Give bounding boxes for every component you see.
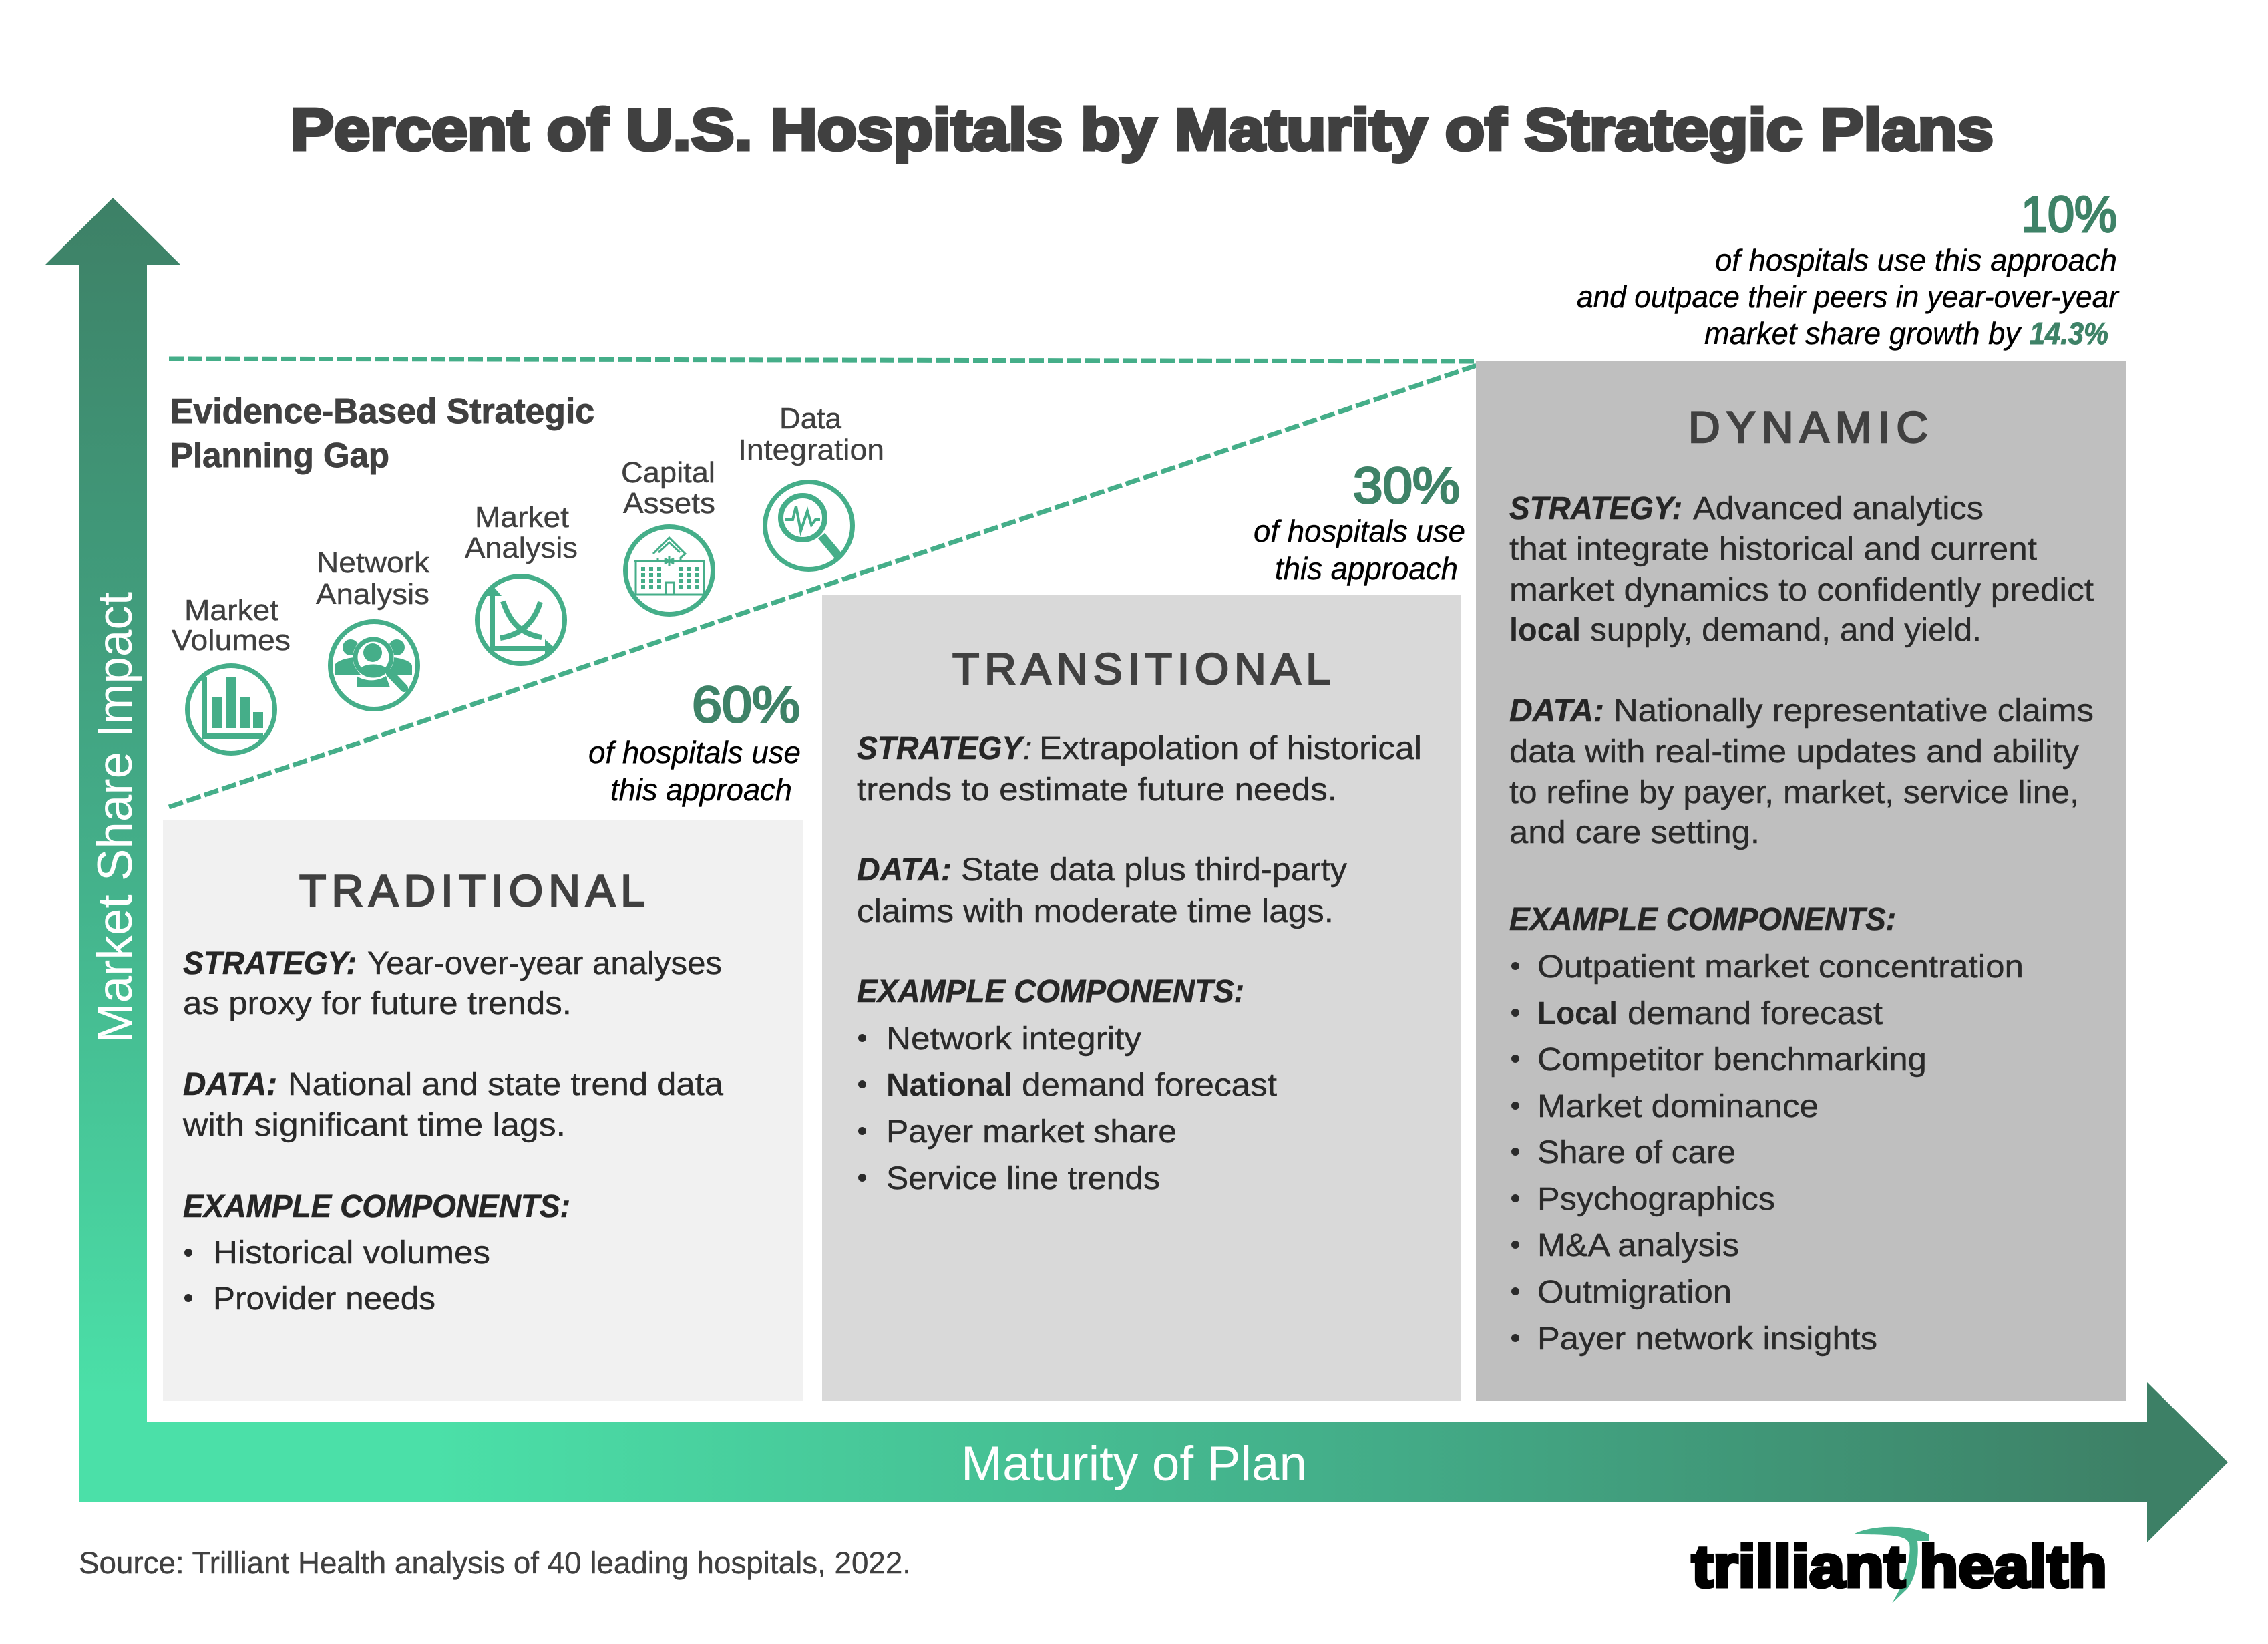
example components list: demand forecast bbox=[1022, 1067, 1277, 1103]
logo: trilliant health: health bbox=[1919, 1533, 2107, 1599]
example components list: Outpatient market concentration bbox=[1537, 949, 2024, 985]
callout: 60 percent: this approach bbox=[610, 772, 792, 807]
strategy text: STRATEGY: bbox=[1509, 491, 1682, 526]
data text: DATA: bbox=[183, 1067, 277, 1102]
panel: transitional bbox=[822, 595, 1461, 1401]
logo: trilliant health: trilliant bbox=[1692, 1533, 1905, 1599]
example components list: EXAMPLE COMPONENTS: bbox=[857, 974, 1244, 1009]
icon label: market analysis bbox=[465, 501, 578, 564]
example components list: EXAMPLE COMPONENTS: bbox=[1509, 902, 1896, 937]
callout: 10 percent: 14.3% bbox=[2030, 316, 2108, 351]
icon label: data integration: Integration bbox=[738, 434, 884, 466]
arrow: maturity of plan axis bbox=[79, 1382, 2228, 1542]
heading: dynamic: DYNAMIC bbox=[1688, 402, 1928, 452]
callout: 10 percent: 10% bbox=[2021, 186, 2117, 243]
callout: 30 percent: 30% bbox=[1353, 458, 1460, 514]
example components list: Psychographics bbox=[1537, 1182, 1775, 1217]
source note: Source: Trilliant Health analysis of 40 leading hospitals, 2022. bbox=[79, 1546, 911, 1580]
data text: DATA: bbox=[1509, 693, 1604, 729]
strategy text: as proxy for future trends. bbox=[183, 986, 572, 1021]
data text: claims with moderate time lags. bbox=[857, 894, 1334, 929]
data text: National and state trend data bbox=[288, 1067, 723, 1102]
axis label: maturity of plan: Maturity of Plan bbox=[961, 1437, 1307, 1491]
heading: transitional: TRANSITIONAL bbox=[952, 644, 1330, 693]
example components list: Provider needs bbox=[213, 1281, 435, 1317]
panel: dynamic bbox=[1476, 361, 2126, 1401]
arrow: market share impact axis bbox=[45, 198, 181, 1502]
example components list: Competitor benchmarking bbox=[1537, 1042, 1927, 1078]
icon: hospital building bbox=[625, 526, 713, 615]
strategy text bbox=[1509, 491, 2094, 648]
panel: traditional bbox=[163, 820, 803, 1401]
icon label: data integration: Data bbox=[779, 402, 842, 435]
example components list: Historical volumes bbox=[213, 1235, 490, 1271]
icon label: network analysis bbox=[316, 546, 430, 611]
title: Percent of U.S. Hospitals by Maturity of Strategic Plans bbox=[291, 96, 1994, 162]
example components list: EXAMPLE COMPONENTS: bbox=[183, 1189, 570, 1224]
dashed planning gap wedge bbox=[169, 359, 1479, 807]
example components list: National bbox=[886, 1067, 1012, 1103]
callout: 30 percent: of hospitals use bbox=[1254, 514, 1465, 548]
example components list bbox=[1509, 902, 2024, 1357]
icon label: market analysis: Analysis bbox=[465, 532, 578, 564]
data text: and care setting. bbox=[1509, 815, 1760, 850]
example components list: Local bbox=[1537, 996, 1618, 1031]
data text bbox=[857, 852, 1347, 929]
callout: 60 percent: of hospitals use bbox=[588, 735, 801, 770]
data text bbox=[1509, 693, 2094, 850]
axis label: market share impact: Market Share Impact bbox=[88, 592, 142, 1043]
example components list: Network integrity bbox=[886, 1021, 1141, 1057]
heading: evidence-based strategic planning gap bbox=[170, 392, 594, 475]
strategy text bbox=[183, 946, 722, 1021]
callout: 10 percent: and outpace their peers in year-over-year bbox=[1577, 279, 2120, 314]
icon label: market analysis: Market bbox=[475, 501, 569, 534]
strategy text: STRATEGY bbox=[857, 731, 1025, 766]
callout: 10 percent bbox=[1577, 186, 2120, 351]
heading: evidence-based strategic planning gap: Evidence-Based Strategic bbox=[170, 392, 594, 431]
callout: 30 percent bbox=[1254, 458, 1465, 586]
strategy text: Advanced analytics bbox=[1693, 491, 1983, 526]
strategy text: STRATEGY: bbox=[183, 946, 357, 981]
data text bbox=[182, 1067, 723, 1143]
data text: data with real-time updates and ability bbox=[1509, 734, 2079, 770]
data text: State data plus third-party bbox=[961, 852, 1347, 888]
icon: crossing curves graph bbox=[477, 576, 565, 664]
data text: with significant time lags. bbox=[182, 1108, 566, 1143]
logo: trilliant health bbox=[1692, 1527, 2107, 1603]
icon label: market volumes bbox=[172, 594, 291, 657]
icon label: data integration bbox=[738, 402, 884, 466]
icon label: market volumes: Volumes bbox=[172, 624, 291, 657]
data text: to refine by payer, market, service line, bbox=[1509, 775, 2079, 810]
example components list: Payer network insights bbox=[1537, 1321, 1877, 1357]
strategy text: : bbox=[1023, 731, 1032, 766]
strategy text: local bbox=[1509, 613, 1581, 648]
icon label: capital assets: Capital bbox=[621, 456, 715, 489]
icon label: capital assets: Assets bbox=[623, 487, 715, 520]
strategy text: supply, demand, and yield. bbox=[1590, 613, 1981, 648]
icon: bar chart bbox=[187, 665, 275, 754]
example components list: Outmigration bbox=[1537, 1275, 1732, 1310]
example components list: Share of care bbox=[1537, 1135, 1736, 1170]
strategy text: Extrapolation of historical bbox=[1039, 731, 1422, 766]
icon label: market volumes: Market bbox=[184, 594, 278, 627]
callout: 60 percent: 60% bbox=[692, 677, 800, 733]
icon: people under magnifier bbox=[330, 621, 418, 709]
strategy text: trends to estimate future needs. bbox=[857, 772, 1337, 808]
heading: traditional: TRADITIONAL bbox=[299, 866, 645, 915]
callout: 30 percent: this approach bbox=[1275, 551, 1458, 586]
data text: DATA: bbox=[857, 852, 952, 888]
strategy text: Year-over-year analyses bbox=[367, 946, 722, 981]
example components list: Service line trends bbox=[886, 1161, 1160, 1196]
example components list bbox=[183, 1189, 570, 1317]
example components list: Market dominance bbox=[1537, 1089, 1819, 1124]
example components list: M&A analysis bbox=[1537, 1228, 1739, 1263]
icon: magnifier with pulse bbox=[765, 482, 852, 569]
icon label: network analysis: Network bbox=[317, 546, 430, 579]
example components list bbox=[857, 974, 1277, 1196]
icon label: network analysis: Analysis bbox=[316, 578, 429, 611]
heading: evidence-based strategic planning gap: Planning Gap bbox=[170, 436, 389, 475]
icon label: capital assets bbox=[621, 456, 715, 520]
strategy text: that integrate historical and current bbox=[1509, 532, 2037, 567]
callout: 10 percent: market share growth by bbox=[1704, 316, 2022, 351]
data text: Nationally representative claims bbox=[1614, 693, 2094, 729]
callout: 60 percent bbox=[588, 677, 801, 807]
strategy text bbox=[857, 731, 1422, 808]
example components list: Payer market share bbox=[886, 1114, 1177, 1150]
callout: 10 percent: of hospitals use this approach bbox=[1715, 242, 2117, 277]
strategy text: market dynamics to confidently predict bbox=[1509, 572, 2094, 608]
example components list: demand forecast bbox=[1628, 996, 1883, 1031]
